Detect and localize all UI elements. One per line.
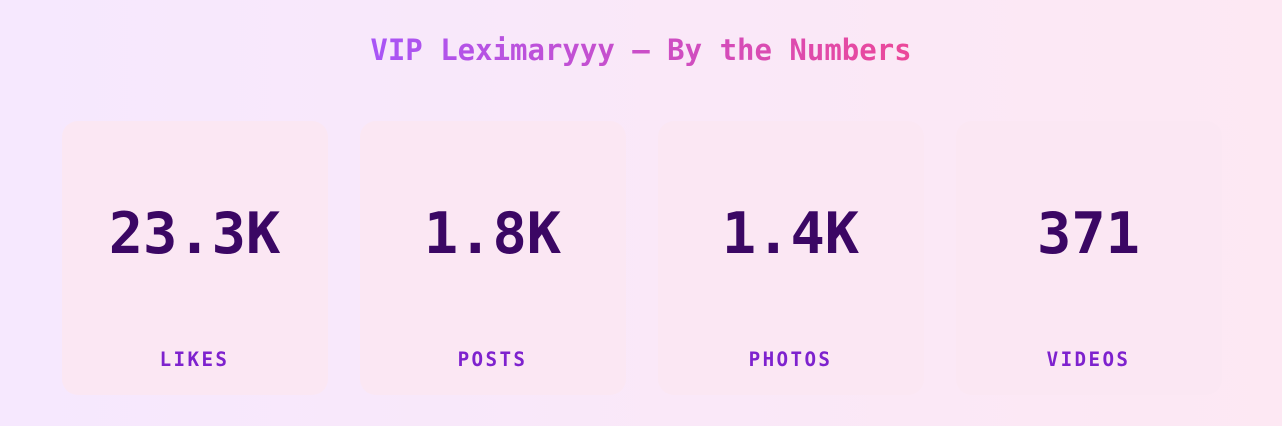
panel: photos <box>658 121 924 395</box>
videos label: VIDEOS <box>1047 348 1130 371</box>
posts label: POSTS <box>458 348 527 371</box>
likes label: LIKES <box>160 348 229 371</box>
posts value: 1.8K <box>424 201 561 267</box>
photos label: PHOTOS <box>749 348 832 371</box>
likes value: 23.3K <box>109 201 280 267</box>
panel: posts <box>360 121 626 395</box>
videos value: 371 <box>1037 201 1140 267</box>
panel: likes <box>62 121 328 395</box>
photos value: 1.4K <box>722 201 859 267</box>
title: VIP Leximaryyy — By the Numbers <box>370 33 912 67</box>
panel: videos <box>956 121 1222 395</box>
